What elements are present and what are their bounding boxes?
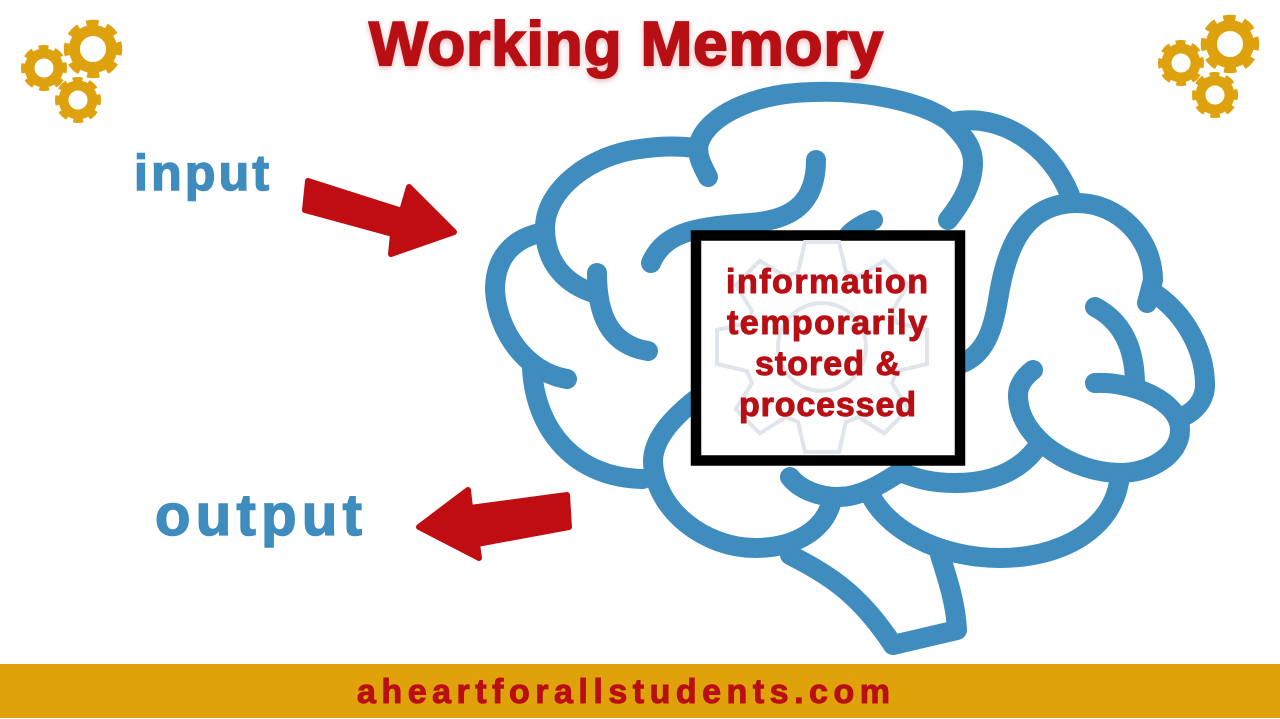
title: Working Memory (369, 10, 884, 79)
box text: information (726, 263, 928, 301)
arrow: output leaving brain (419, 490, 569, 558)
box text (726, 263, 928, 424)
panel: working memory box (696, 236, 960, 460)
arrow: input pointing to brain (305, 181, 454, 254)
box frame (696, 236, 960, 460)
icon: faint gear watermark (717, 242, 927, 452)
box text: processed (739, 386, 916, 424)
gear: medium (1160, 42, 1202, 84)
gear: large (67, 23, 119, 75)
gear: large (1204, 18, 1256, 70)
box text: stored & (755, 345, 900, 383)
label: output: output (155, 483, 362, 548)
footer band (0, 664, 1280, 718)
icon: gears top left (24, 23, 119, 120)
icon: gears top right (1160, 18, 1256, 116)
icon: brain outline (495, 92, 1205, 645)
gear: medium (24, 48, 64, 88)
footer website text: aheartforallstudents.com (357, 673, 890, 711)
box text: temporarily (727, 304, 927, 342)
brain: top lobe (698, 92, 973, 220)
gear: small (1194, 74, 1236, 116)
label: input: input (134, 145, 269, 201)
gear: small (58, 80, 98, 120)
